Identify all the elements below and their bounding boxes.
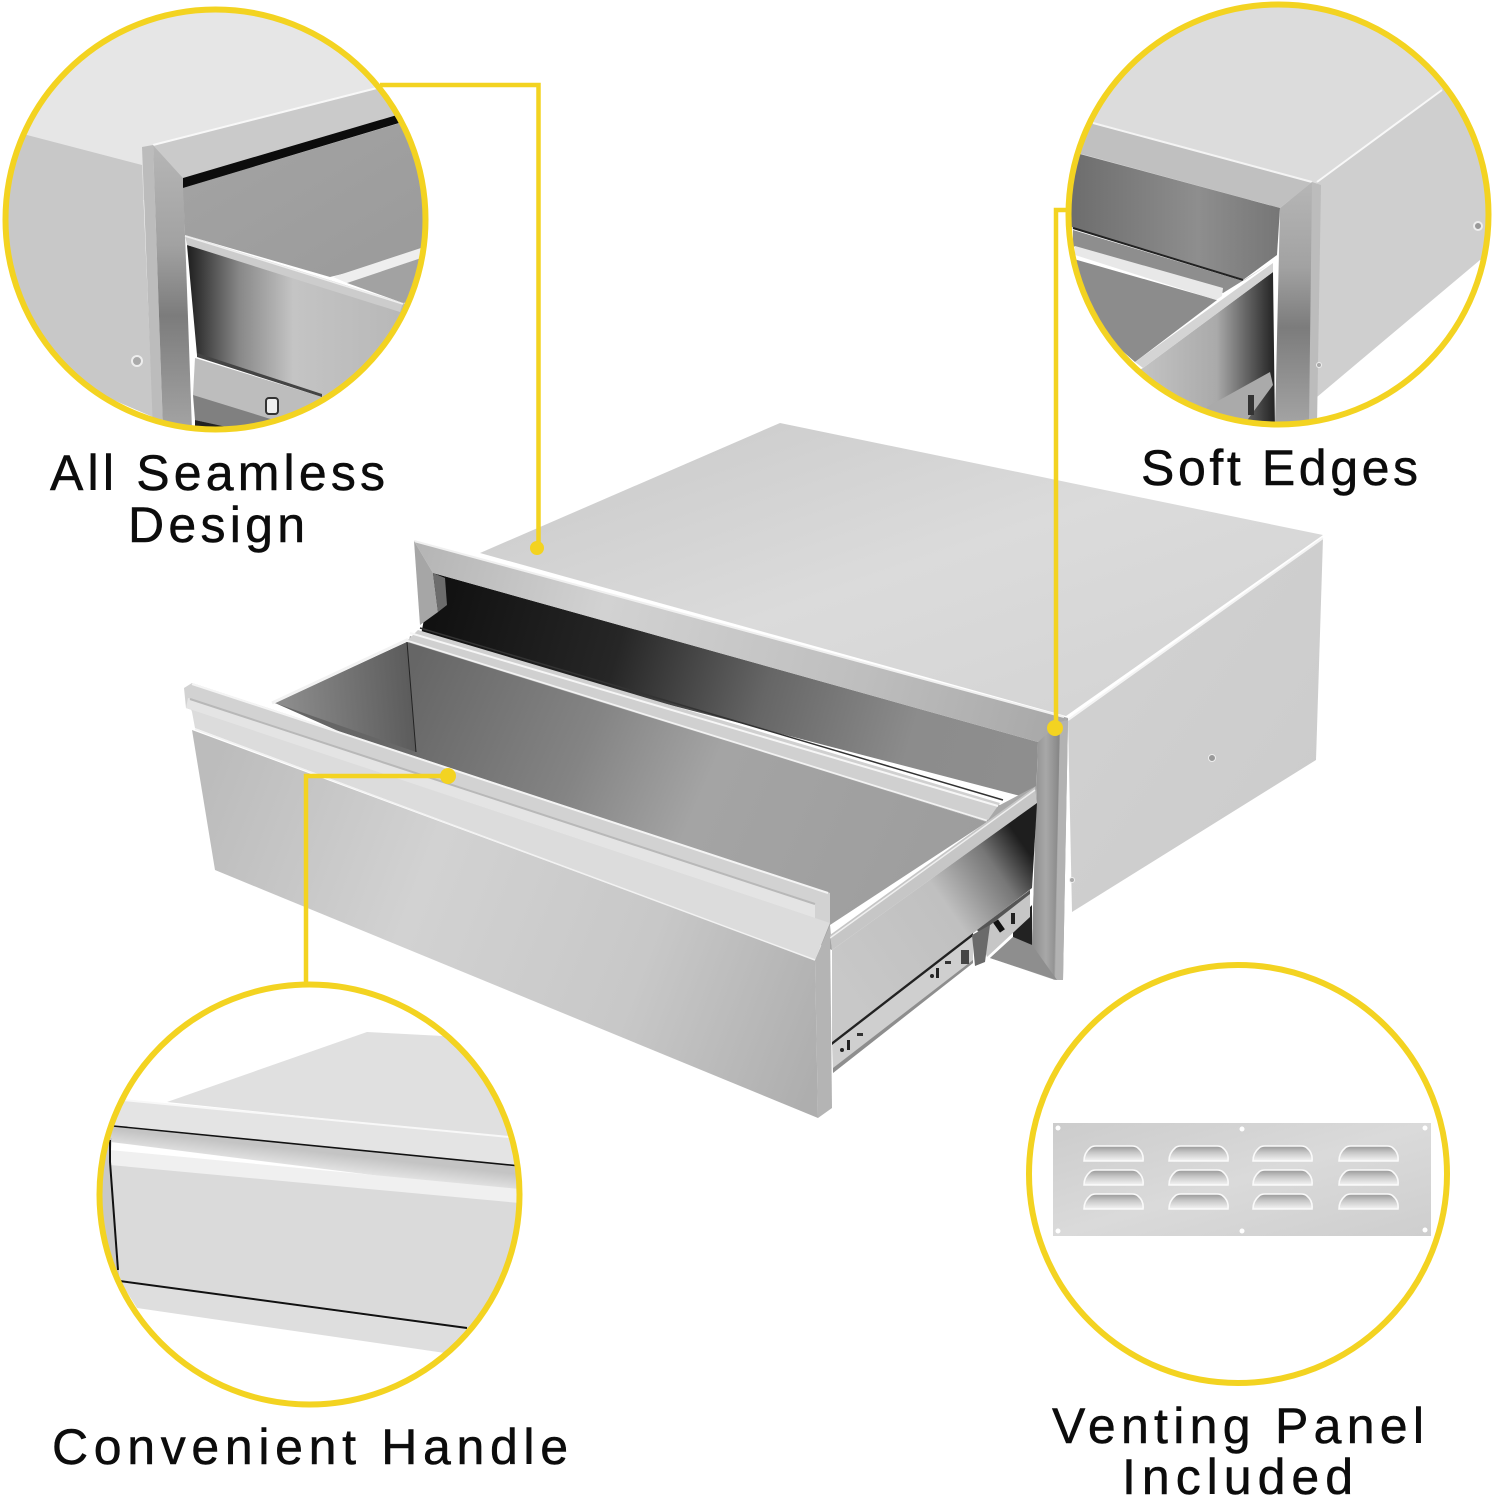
front panel <box>110 1162 530 1330</box>
front bezel <box>414 541 1068 980</box>
callout circle: soft edges <box>1060 0 1495 430</box>
rail <box>1135 263 1273 368</box>
top black line <box>113 1126 520 1166</box>
label: all seamless design: Design <box>128 497 305 553</box>
main drawer product <box>184 423 1323 1118</box>
mounting holes <box>1056 1126 1428 1234</box>
callout circle: convenient handle <box>90 984 530 1404</box>
side surface <box>0 128 153 417</box>
floor <box>1076 260 1217 362</box>
frame right <box>1275 182 1312 422</box>
side screw <box>132 356 142 366</box>
circle ring <box>100 984 520 1404</box>
label: venting panel included: Venting Panel <box>1052 1398 1424 1454</box>
drawer side <box>187 245 405 397</box>
label: all seamless design <box>50 445 385 553</box>
drawer right rail <box>830 787 1037 950</box>
circle ring <box>6 10 426 430</box>
floor strip <box>334 248 420 283</box>
cabinet right side <box>1068 538 1323 912</box>
top surface <box>167 1032 530 1140</box>
top surface <box>26 12 398 200</box>
drawer front panel <box>186 695 832 1118</box>
drawer handle <box>184 683 830 923</box>
rail <box>185 235 403 312</box>
upper band <box>114 1101 514 1166</box>
inner back <box>1065 150 1280 280</box>
dark line <box>1073 228 1243 280</box>
cabinet interior back <box>420 573 1038 800</box>
handle strip <box>110 1127 516 1188</box>
vent slots <box>1084 1146 1398 1209</box>
inner back <box>183 123 440 277</box>
screw <box>1474 222 1482 230</box>
side surface <box>1317 90 1486 396</box>
cabinet top face <box>480 423 1323 716</box>
label: convenient handle: Convenient Handle <box>52 1419 568 1475</box>
callout circle: venting panel <box>1029 965 1447 1383</box>
drawer interior floor and wall <box>272 628 1003 950</box>
bottom band <box>120 1281 480 1353</box>
cabinet interior shelf strip <box>408 636 1036 822</box>
connector: seamless design <box>380 85 544 555</box>
slide <box>1220 372 1273 420</box>
circle ring <box>1068 4 1488 424</box>
callout circle: all seamless design <box>0 0 440 440</box>
connector: soft edges <box>1047 210 1072 736</box>
black gap <box>183 115 399 188</box>
label: all seamless design: All Seamless <box>50 445 385 501</box>
top surface <box>1080 8 1444 200</box>
white strip <box>1075 246 1223 300</box>
left edge <box>102 1138 120 1276</box>
circle ring <box>1029 965 1447 1383</box>
frame band <box>1080 123 1311 208</box>
label: venting panel included <box>1052 1398 1424 1500</box>
drawer slide rail <box>832 890 1030 1073</box>
drawer side <box>1141 272 1275 422</box>
slide <box>193 358 322 419</box>
drawer side panel <box>832 803 1037 1042</box>
label: soft edges: Soft Edges <box>1141 440 1418 496</box>
frame band <box>154 89 394 178</box>
vent panel <box>1053 1123 1431 1236</box>
connector: handle <box>306 768 456 986</box>
